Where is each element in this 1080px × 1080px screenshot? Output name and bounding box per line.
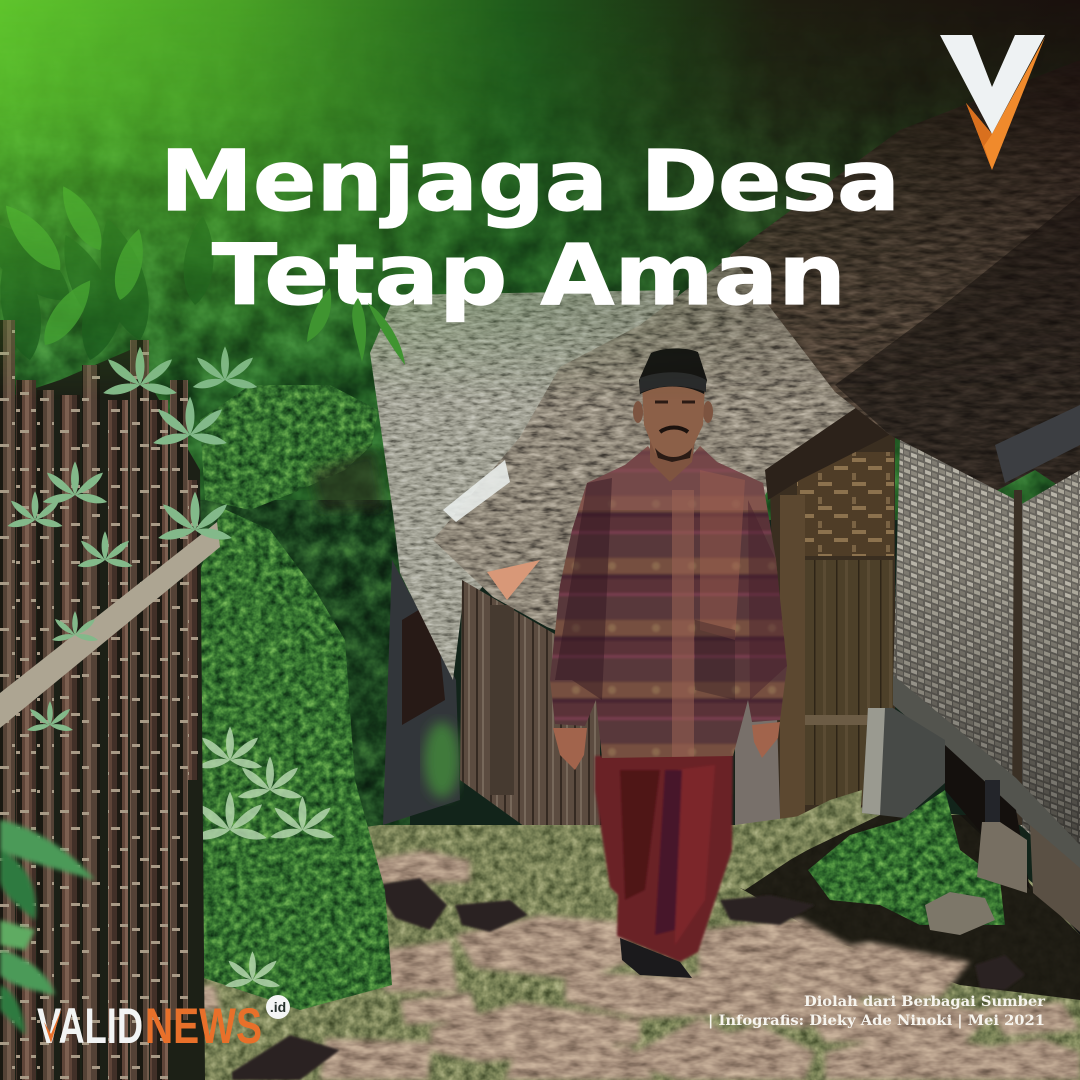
feet <box>620 938 692 978</box>
title line 2: Tetap Aman <box>212 226 846 324</box>
trousers <box>595 754 733 962</box>
dark broad leaves <box>0 203 217 365</box>
VALIDNEWS logo <box>37 995 290 1054</box>
fence rail <box>0 522 220 728</box>
centre-left shrubs <box>120 508 392 1010</box>
title <box>160 132 900 324</box>
dark rocks <box>232 878 1025 1080</box>
back thatched house <box>370 290 680 825</box>
ground and stone path <box>0 790 1080 1080</box>
hands <box>553 722 780 770</box>
shirt <box>550 446 787 758</box>
pale cassava leaves on the fence <box>7 346 257 731</box>
path stones <box>175 850 1080 1080</box>
front thatched roof <box>433 245 895 632</box>
upper-left foliage <box>0 180 217 365</box>
light rock <box>925 892 995 935</box>
walking man <box>540 348 800 978</box>
source line: Diolah dari Berbagai Sumber <box>804 994 1046 1010</box>
pale plant bed <box>722 790 862 890</box>
head <box>633 385 713 462</box>
logo orange V accent <box>44 1008 62 1043</box>
author line: | Infografis: Dieky Ade Ninoki | Mei 2021 <box>708 1013 1045 1029</box>
concrete foundation blocks <box>862 708 1027 893</box>
VALID wordmark: VALID <box>37 998 143 1054</box>
hanging leaves over title <box>307 288 405 365</box>
logo V mark <box>940 35 1045 170</box>
id badge: .id <box>270 999 286 1015</box>
title line 1: Menjaga Desa <box>160 132 900 230</box>
dark green shrub <box>808 790 1005 925</box>
neck <box>650 440 695 482</box>
NEWS wordmark: NEWS <box>145 998 262 1054</box>
bamboo fence <box>0 320 220 1080</box>
id badge <box>266 995 290 1019</box>
black cap <box>639 348 707 394</box>
blurred foreground leaves <box>0 820 95 1035</box>
woven bamboo wall <box>893 440 1080 932</box>
centre wall and wooden doors <box>460 430 895 845</box>
credit text <box>708 994 1046 1029</box>
gradient overlay top <box>0 0 1080 400</box>
dark right-hand roof <box>730 60 1080 500</box>
